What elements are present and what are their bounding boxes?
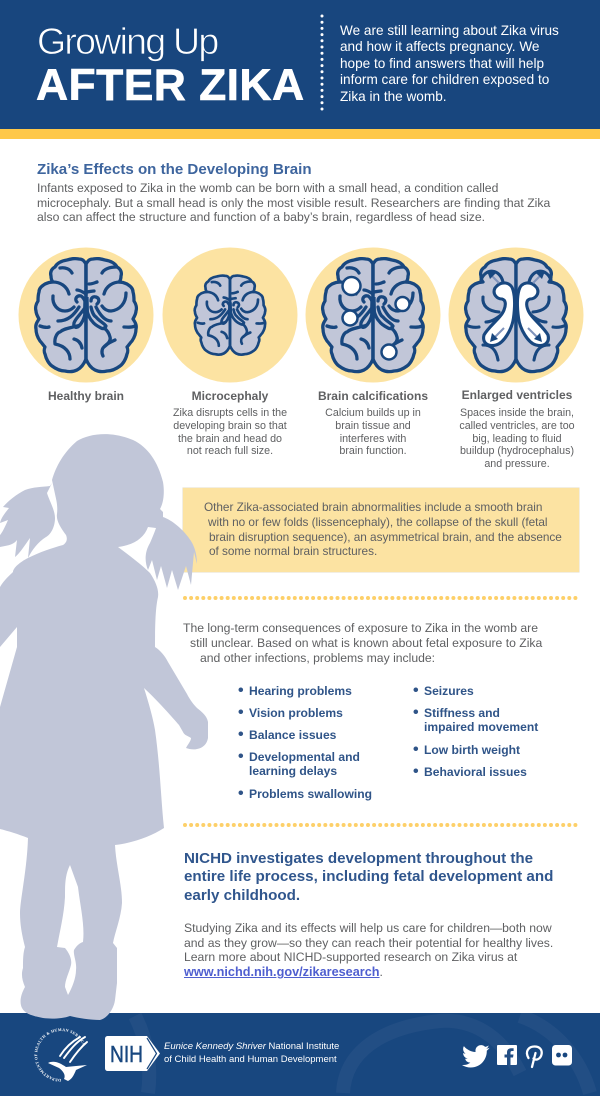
footer band [0,1013,600,1096]
NICHD heading: entire life process, including fetal development and [184,868,553,885]
closing text: www.nichd.nih.gov/zikaresearch. [184,965,383,979]
title: Growing Up [37,20,218,62]
bullet list: left column: • [238,704,244,721]
caption: brain calcifications: brain tissue and [335,420,411,432]
consequences text: The long-term consequences of exposure to Zika in the womb are [183,621,538,635]
callout: other abnormalities: with no or few folds (lissencephaly), the collapse of the skull (fetal [208,515,548,529]
NICHD heading: early childhood. [184,886,300,904]
bullet list: left column: Balance issues [249,728,336,742]
microcephaly brain [162,248,298,382]
section heading: Zika’s Effects on the Developing Brain [37,161,312,178]
caption: microcephaly: Zika disrupts cells in the [173,407,287,419]
caption: brain calcifications [318,389,428,457]
caption: microcephaly: Microcephaly [192,389,268,403]
section intro text: microcephaly. But a small head is only the most visible result. Researchers are finding that Zika [37,196,550,210]
caption: microcephaly: the brain and head do [178,433,282,445]
brain illustrations [18,248,584,382]
bullet list: left column: • [238,682,244,699]
calcifications brain [306,248,440,382]
header intro text: We are still learning about Zika virus [340,23,559,38]
bullet list: right column: Seizures [424,684,474,698]
caption: enlarged ventricles: Enlarged ventricles [462,388,572,402]
caption: brain calcifications: Brain calcifications [318,389,428,403]
caption: enlarged ventricles: and pressure. [484,458,550,470]
callout: other abnormalities [183,488,579,572]
callout: other abnormalities: brain disruption sequence), an asymmetrical brain, and the absence [209,530,562,544]
bullet list: right column: • [413,763,419,780]
caption: brain calcifications: interferes with [340,433,406,445]
healthy brain [18,248,154,382]
caption: enlarged ventricles [459,388,575,470]
header intro text: Zika in the womb. [340,89,447,104]
title: AFTER ZIKA [36,60,305,110]
bullet list: right column: • [413,741,419,758]
title [36,20,305,110]
caption: enlarged ventricles: buildup (hydrocephalus) [460,445,574,457]
consequences text: still unclear. Based on what is known about fetal exposure to Zika [190,636,542,650]
closing text [184,921,553,979]
bullet list: right column: Low birth weight [424,743,520,757]
header intro text: inform care for children exposed to [340,72,549,87]
caption: microcephaly [173,389,287,457]
header band [0,0,600,129]
bullet list: left column: • [238,748,244,765]
bullet list: left column: Developmental and [249,750,360,764]
gold stripe [0,129,600,139]
callout: other abnormalities: of some normal brain structures. [209,544,377,558]
bullet list: right column: Behavioral issues [424,765,527,779]
closing text: Studying Zika and its effects will help us care for children—both now [184,921,552,935]
NICHD heading [184,850,553,904]
section intro text [37,181,550,224]
caption: brain calcifications: Calcium builds up in [325,407,421,419]
caption: brain calcifications: brain function. [339,445,407,457]
bullet list: left column: Hearing problems [249,684,352,698]
caption: microcephaly: developing brain so that [173,420,287,432]
callout: other abnormalities: Other Zika-associated brain abnormalities include a smooth brain [204,500,542,514]
section intro text: Infants exposed to Zika in the womb can be born with a small head, a condition called [37,181,498,195]
bullet list: left column: Problems swallowing [249,787,372,801]
bullet list: left column: Vision problems [249,706,343,720]
caption: healthy brain: Healthy brain [48,389,124,403]
consequences text [183,621,542,665]
bullet list: right column: Stiffness and [424,706,500,720]
header dotted divider [320,14,324,110]
consequences text: and other infections, problems may include: [200,651,435,665]
caption: microcephaly: not reach full size. [187,445,273,457]
bullet list: left column [238,682,372,802]
enlarged ventricles brain [448,248,584,382]
section intro text: also can affect the structure and function of a baby’s brain, regardless of head size. [37,210,485,224]
bullet list: right column: impaired movement [424,720,538,734]
caption: enlarged ventricles: Spaces inside the brain, [460,407,574,419]
NIH logo: NIH [110,1041,143,1067]
bullet list: left column: • [238,726,244,743]
closing text: Learn more about NICHD-supported research on Zika virus at [184,950,517,964]
institute name [164,1041,339,1065]
header intro text: and how it affects pregnancy. We [340,39,540,54]
header intro text [340,23,559,104]
bullet list: right column [413,682,538,780]
bullet list: right column: • [413,704,419,721]
closing text: and as they grow—so they can reach their potential for healthy lives. [184,936,553,950]
HHS seal: DEPARTMENT OF HEALTH & HUMAN SERVICES-USA [34,1028,86,1082]
bullet list: right column: • [413,682,419,699]
bullet list: left column: learning delays [249,764,337,778]
caption: enlarged ventricles: called ventricles, are too [459,420,575,432]
header intro text: hope to find answers that will help [340,56,544,71]
bullet list: left column: • [238,785,244,802]
institute name: of Child Health and Human Development [164,1054,337,1065]
NICHD heading: NICHD investigates development throughout the [184,850,533,866]
institute name: Eunice Kennedy Shriver National Institute [164,1041,339,1052]
caption: enlarged ventricles: big, leading to fluid [472,433,562,445]
